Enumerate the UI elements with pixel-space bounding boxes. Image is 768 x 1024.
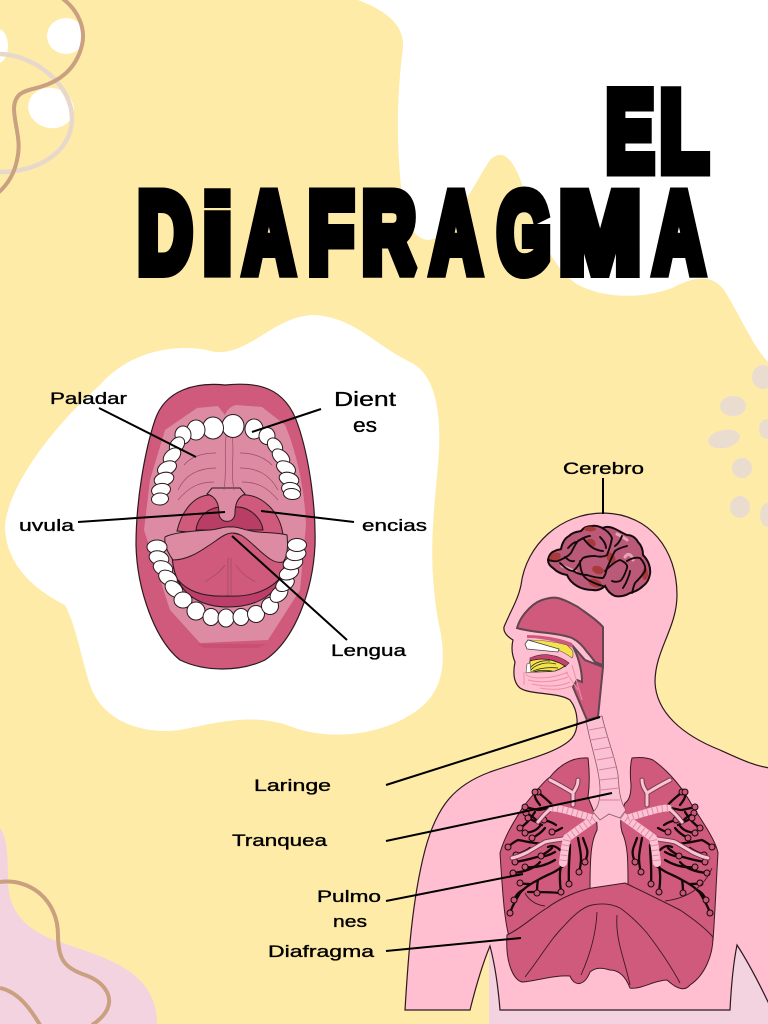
upper teeth bbox=[151, 414, 301, 506]
throat arches bbox=[177, 495, 283, 535]
soft palate fold bbox=[165, 527, 288, 562]
title word: DIAFRAGMA: D bbox=[138, 172, 192, 296]
label: Pulmones with pointer: Pulmo bbox=[317, 888, 381, 906]
diaphragm bbox=[507, 883, 713, 989]
trachea rings bbox=[589, 727, 620, 800]
title word: DIAFRAGMA: R bbox=[362, 171, 416, 296]
label: Paladar with pointer bbox=[50, 390, 196, 457]
title word: DIAFRAGMA: F bbox=[308, 171, 354, 296]
title word: DIAFRAGMA: A bbox=[244, 171, 294, 296]
palate stripe bbox=[527, 635, 573, 648]
right lung bbox=[621, 758, 718, 940]
label: uvula with pointer: uvula bbox=[19, 517, 75, 535]
decoration: beige ring bbox=[0, 54, 72, 172]
right alveoli bbox=[632, 789, 715, 916]
label: Lengua with pointer bbox=[232, 536, 407, 660]
illustration: throat bbox=[572, 645, 603, 720]
right lung lobe line bbox=[665, 868, 712, 901]
left lung bbox=[500, 758, 597, 940]
title word: DIAFRAGMA: A bbox=[431, 171, 481, 296]
left dark bronchial branches bbox=[508, 792, 587, 913]
illustration: lungs and diaphragm bbox=[500, 716, 718, 989]
title word: DIAFRAGMA: G bbox=[497, 170, 551, 296]
background: pale pink corner blob bbox=[0, 828, 157, 1024]
tongue lines bbox=[530, 661, 558, 672]
decoration: beige dots right bbox=[706, 365, 768, 527]
tongue underside bbox=[178, 578, 280, 607]
tongue section bbox=[528, 659, 565, 672]
right dark bronchial branches bbox=[633, 792, 712, 913]
label: Paladar with pointer: Paladar bbox=[50, 390, 128, 408]
left bronchi bbox=[512, 780, 602, 863]
panel: white blob behind mouth bbox=[5, 315, 443, 735]
background: pale pink area under the body bbox=[489, 940, 768, 1024]
lower teeth bbox=[147, 538, 307, 627]
upper teeth side bbox=[525, 640, 559, 652]
label: Lengua with pointer: Lengua bbox=[331, 642, 407, 660]
left bronchi outline bbox=[512, 780, 578, 858]
label: encias with pointer bbox=[261, 511, 427, 535]
label: Dientes with pointer bbox=[252, 389, 397, 437]
brain highlights bbox=[562, 534, 633, 572]
tongue groove bbox=[205, 558, 255, 595]
upper yellow bbox=[528, 640, 573, 658]
brain folds bbox=[548, 528, 645, 593]
label: uvula with pointer bbox=[19, 512, 225, 535]
right bronchi rings bbox=[618, 808, 668, 863]
tongue top band bbox=[530, 655, 569, 667]
title word: DIAFRAGMA: M bbox=[559, 171, 641, 296]
title word: DIAFRAGMA: A bbox=[654, 171, 704, 296]
label: Diafragma with pointer: Diafragma bbox=[268, 943, 375, 961]
throat dark centre bbox=[196, 507, 263, 530]
palate ridges bbox=[178, 436, 278, 500]
left bronchi rings bbox=[552, 808, 602, 863]
lower mouth lines bbox=[524, 665, 582, 700]
title word: EL bbox=[606, 69, 708, 194]
decoration: tan curve top left bbox=[0, 0, 83, 193]
tongue bbox=[172, 532, 284, 598]
illustration: open mouth bbox=[136, 384, 315, 669]
illustration: brain bbox=[548, 526, 650, 596]
trachea bbox=[586, 716, 626, 820]
label: Dientes with pointer: Dient bbox=[334, 389, 397, 411]
lower inner stripe bbox=[197, 644, 266, 648]
label: Pulmones with pointer bbox=[317, 874, 523, 931]
label: Tranquea with pointer bbox=[232, 793, 612, 850]
title bbox=[138, 69, 708, 297]
label: Cerebro with pointer bbox=[563, 460, 644, 514]
title word: DIAFRAGMA bbox=[138, 170, 704, 297]
label: Dientes with pointer: es bbox=[353, 415, 377, 437]
title word: DIAFRAGMA: i bbox=[200, 172, 235, 297]
decoration: white spots top left bbox=[0, 18, 85, 133]
illustration: oral cavity bbox=[524, 635, 582, 700]
label: Cerebro with pointer: Cerebro bbox=[563, 460, 644, 478]
brain red patches bbox=[548, 526, 648, 589]
brain mass bbox=[548, 526, 650, 596]
trachea tube bbox=[586, 716, 626, 820]
right bronchi bbox=[618, 780, 708, 863]
label: Tranquea with pointer: Tranquea bbox=[232, 832, 328, 850]
label: Diafragma with pointer bbox=[268, 938, 521, 961]
left alveoli bbox=[505, 789, 588, 916]
label: Laringe with pointer: Laringe bbox=[254, 777, 331, 795]
illustration: nasal cavity bbox=[517, 598, 603, 665]
diaphragm inner lines bbox=[525, 893, 680, 985]
lips bbox=[136, 384, 315, 669]
uvula bbox=[207, 488, 245, 521]
palate and inner cheeks bbox=[144, 405, 306, 643]
right bronchi outline bbox=[642, 780, 708, 858]
decoration: tan curves bottom left bbox=[0, 882, 109, 1024]
title word: EL: E bbox=[606, 69, 654, 194]
lower teeth bbox=[526, 663, 531, 673]
label: Pulmones with pointer: nes bbox=[333, 913, 367, 931]
label: Laringe with pointer bbox=[254, 717, 600, 795]
title word: EL: L bbox=[660, 69, 708, 194]
label: encias with pointer: encias bbox=[362, 517, 427, 535]
illustration: human body silhouette bbox=[405, 513, 768, 1010]
